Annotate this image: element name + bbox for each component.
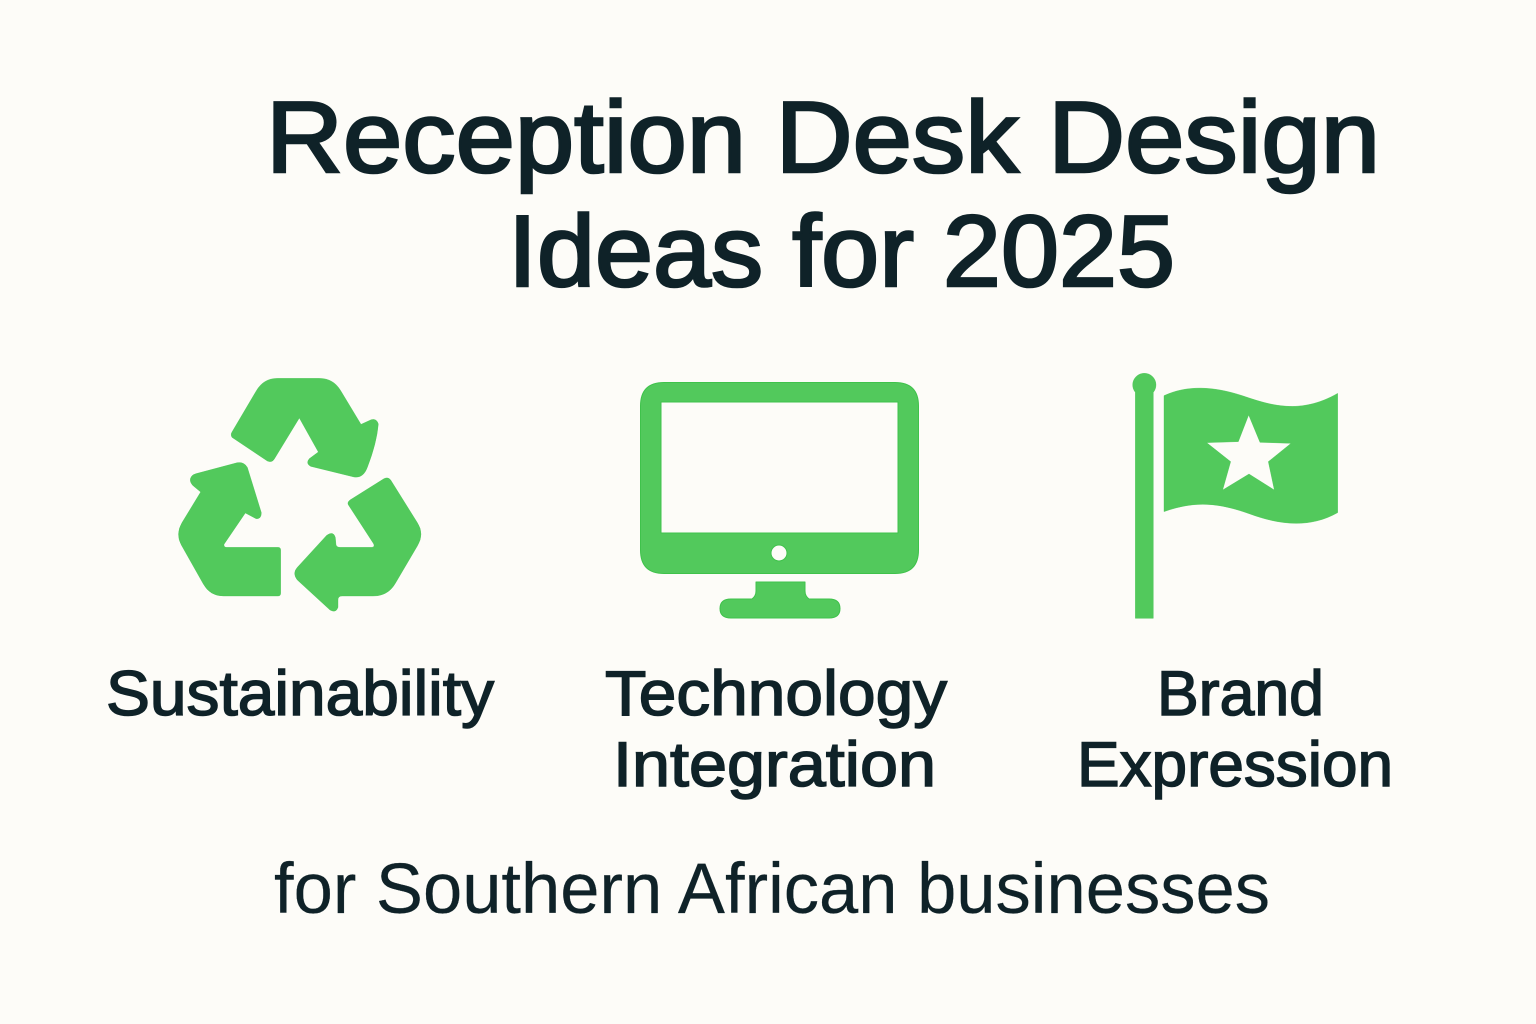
title: Ideas for 2025 xyxy=(508,196,1175,308)
icon: recycling arrows xyxy=(178,378,421,611)
label: technology integration: Technology xyxy=(605,659,948,729)
icon: flag with star xyxy=(1133,373,1338,618)
subtitle: for Southern African businesses xyxy=(274,850,1270,929)
label: brand expression: Brand xyxy=(1157,659,1324,729)
label: sustainability: Sustainability xyxy=(106,659,495,729)
title xyxy=(266,82,1380,308)
label: technology integration: Integration xyxy=(613,730,936,800)
icon: computer monitor xyxy=(640,382,918,618)
label: brand expression xyxy=(1077,659,1393,800)
title: Reception Desk Design xyxy=(266,82,1380,194)
label: brand expression: Expression xyxy=(1077,730,1393,800)
label: technology integration xyxy=(605,659,948,800)
